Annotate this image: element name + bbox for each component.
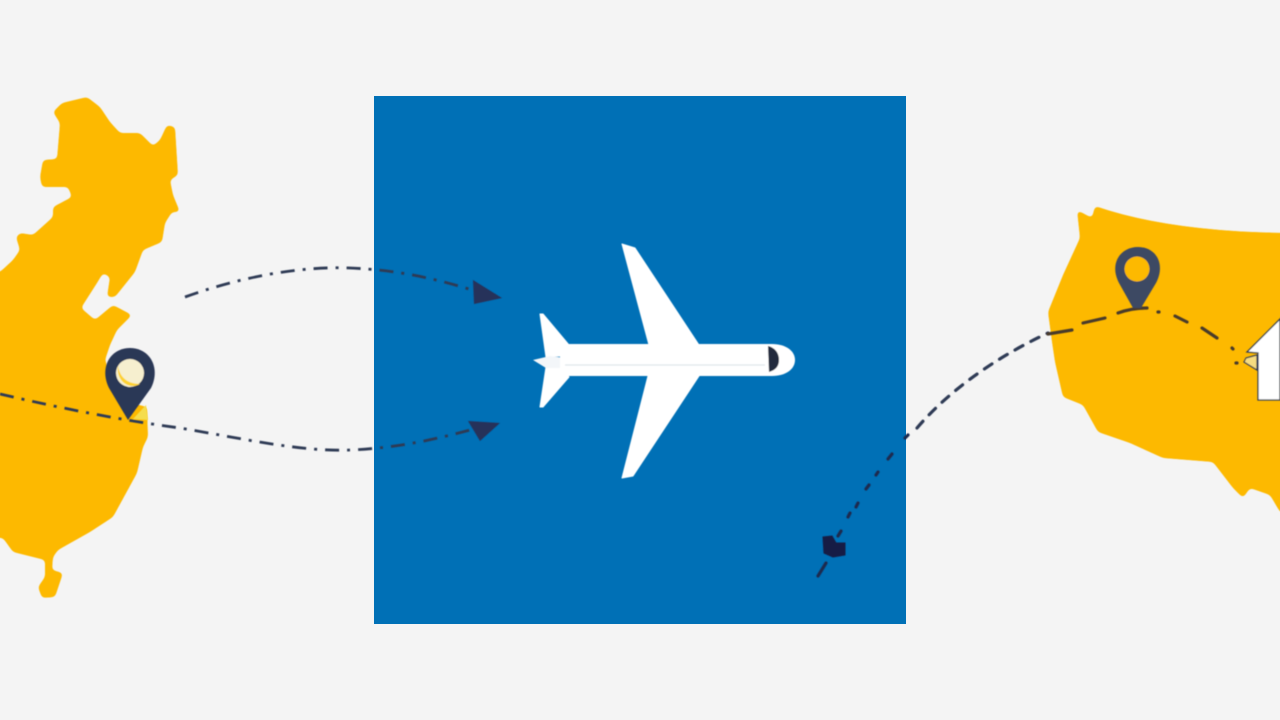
map: United States (1048, 206, 1280, 515)
lower wing (622, 376, 699, 478)
arrowhead: upper (473, 280, 502, 304)
icon: house (1244, 319, 1280, 400)
icon: China location pin (105, 348, 155, 420)
route: plane to United States (818, 308, 1237, 576)
upper wing (622, 244, 699, 345)
upper tail (540, 314, 569, 357)
route: China to plane lower (0, 394, 500, 450)
tail cone (533, 356, 580, 368)
icon: United States location pin (1115, 247, 1160, 308)
route: China to plane upper (185, 268, 502, 304)
lower tail (540, 367, 569, 407)
cockpit window (768, 346, 779, 372)
pin shadow highlight (133, 405, 148, 420)
icon: small marker blob (823, 536, 845, 557)
fuselage shadow line (565, 364, 765, 366)
house side detail (1244, 355, 1257, 370)
panel: blue square (374, 96, 906, 624)
arrowhead: lower (468, 421, 500, 441)
fuselage (560, 344, 795, 376)
map: China (0, 97, 180, 598)
icon: airplane (533, 244, 795, 478)
